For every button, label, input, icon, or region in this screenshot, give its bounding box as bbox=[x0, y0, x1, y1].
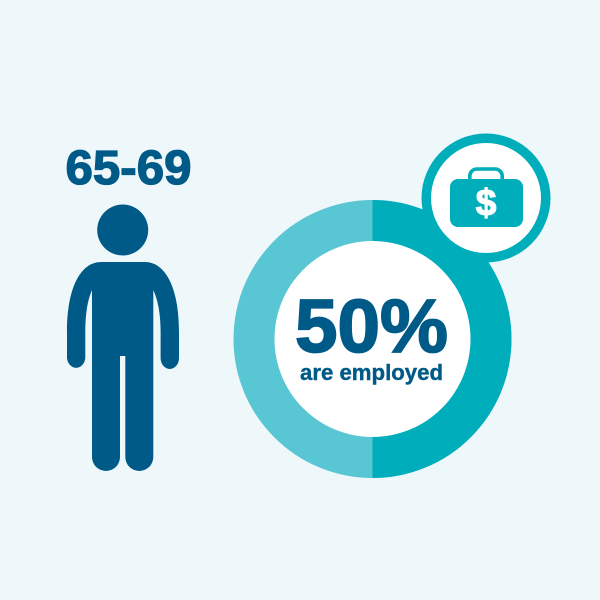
caption: are employed bbox=[300, 360, 443, 385]
age heading: 65-69 bbox=[66, 142, 192, 195]
percentage value: 50% bbox=[295, 284, 448, 368]
donut chart: 50% employed bbox=[234, 200, 512, 478]
icon: briefcase badge: $ bbox=[476, 182, 497, 223]
icon: briefcase badge bbox=[422, 134, 550, 262]
icon: person bbox=[67, 204, 179, 471]
